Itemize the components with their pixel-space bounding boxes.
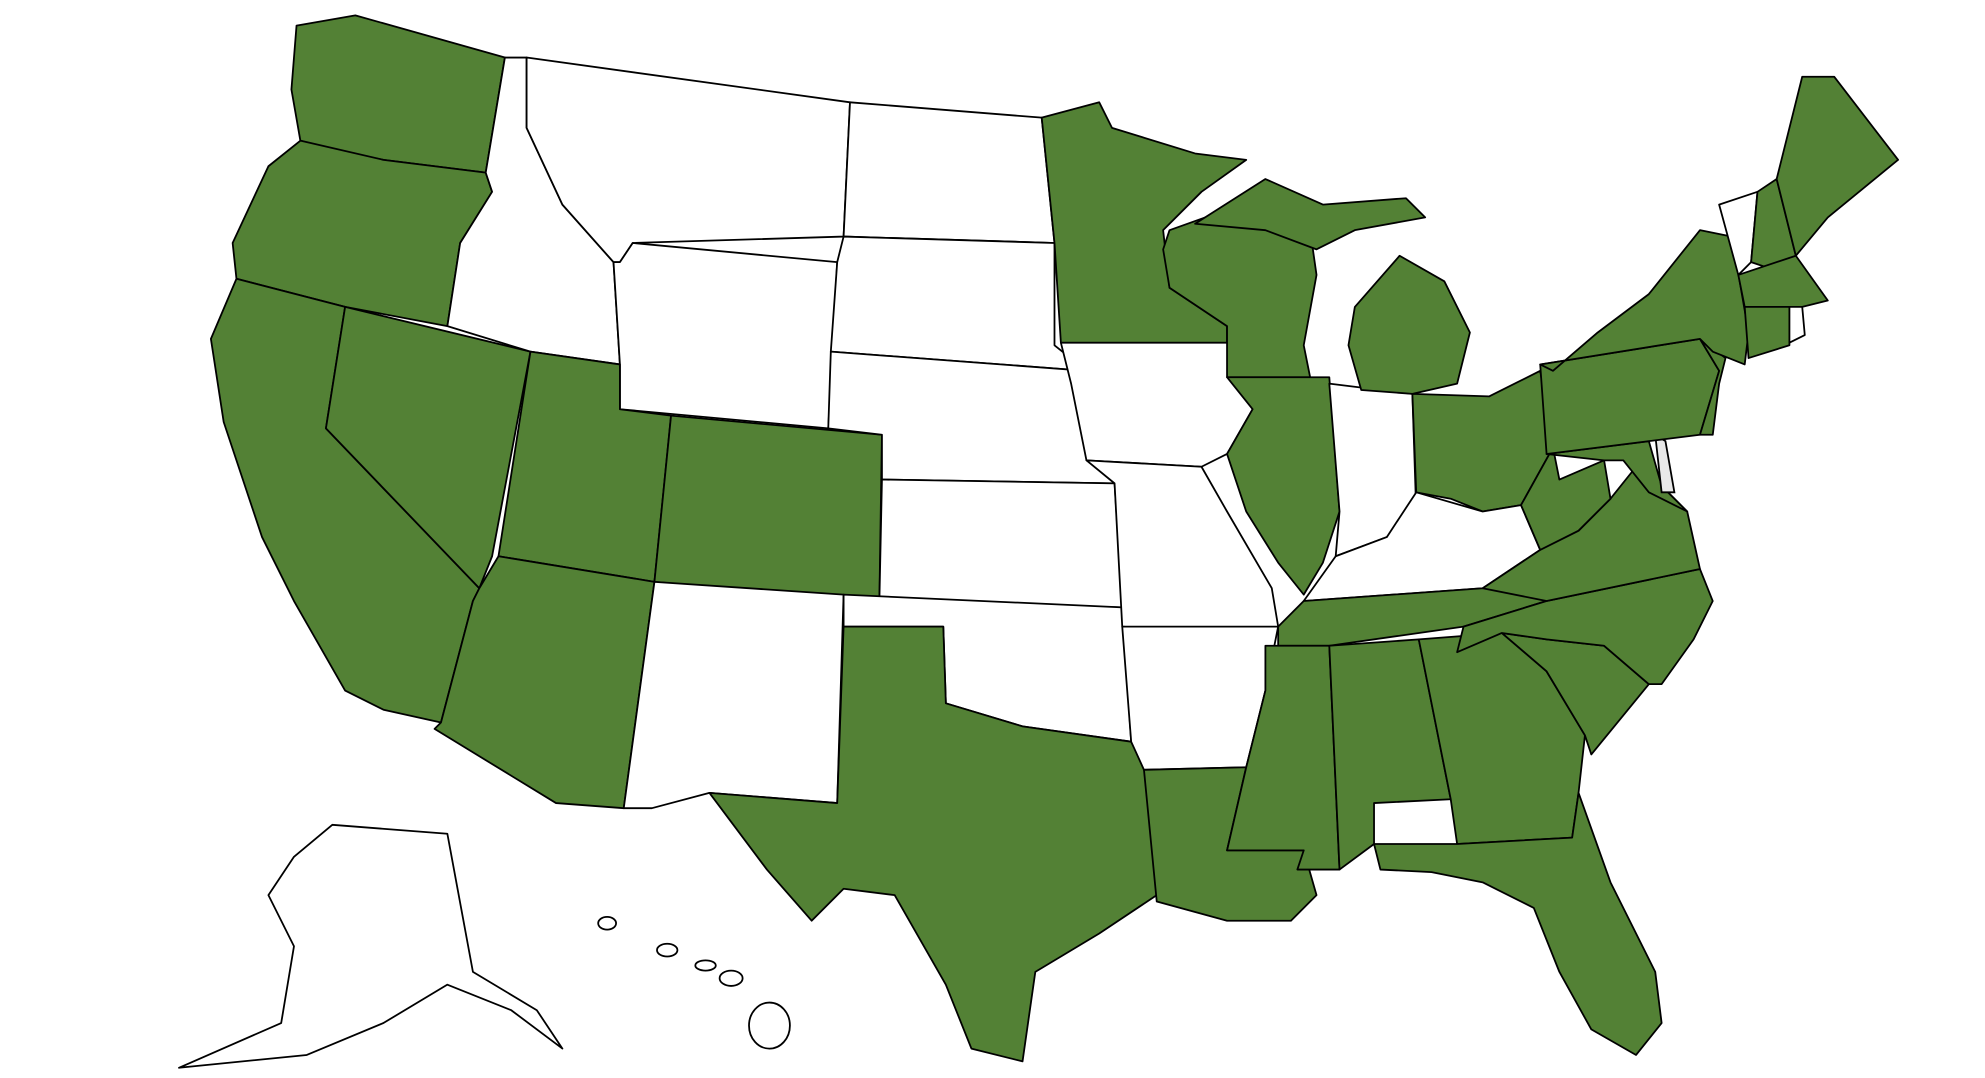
state: VT xyxy=(1719,192,1757,275)
state: MI xyxy=(1195,179,1470,394)
state: NM xyxy=(624,582,844,808)
state: NJ xyxy=(1700,339,1726,435)
state: AR xyxy=(1122,627,1278,770)
state: MD xyxy=(1547,441,1687,512)
state: MO xyxy=(1086,460,1278,637)
state: AZ xyxy=(435,556,654,808)
state: LA xyxy=(1144,767,1317,921)
state: WA xyxy=(291,15,505,173)
state: KY xyxy=(1304,492,1540,601)
state: IA xyxy=(1061,343,1253,467)
state: MS xyxy=(1227,646,1340,870)
state: TX xyxy=(709,627,1157,1061)
state: SD xyxy=(831,237,1086,371)
state: MN xyxy=(1042,102,1246,343)
state: NE xyxy=(828,352,1115,483)
state: OH xyxy=(1412,371,1553,512)
state: ND xyxy=(844,102,1054,243)
state: UT xyxy=(498,352,671,582)
state: NH xyxy=(1751,179,1796,269)
state: VA xyxy=(1483,467,1700,601)
state: RI xyxy=(1789,307,1805,343)
state: PA xyxy=(1540,339,1719,454)
state: CT xyxy=(1745,307,1789,358)
state: MT xyxy=(527,58,850,262)
state: TN xyxy=(1278,575,1572,646)
state: FL xyxy=(1374,793,1662,1055)
state: NV xyxy=(326,307,530,588)
state: NY xyxy=(1540,230,1749,371)
state: HI xyxy=(598,917,790,1049)
state: OK xyxy=(844,595,1131,742)
state: SC xyxy=(1502,633,1649,754)
state: WI xyxy=(1163,198,1317,377)
state: OR xyxy=(233,141,492,326)
state: WV xyxy=(1521,448,1610,550)
state: CO xyxy=(654,416,882,601)
state: NC xyxy=(1457,569,1713,684)
state: AL xyxy=(1329,639,1451,870)
state: ME xyxy=(1777,77,1898,256)
state: DE xyxy=(1655,435,1674,492)
state: MA xyxy=(1738,256,1828,307)
state: IL xyxy=(1227,377,1340,595)
state: WY xyxy=(614,243,837,428)
state: KS xyxy=(879,480,1122,607)
state: AK xyxy=(179,825,562,1068)
state: CA xyxy=(211,279,479,723)
state: GA xyxy=(1419,633,1585,844)
state: IN xyxy=(1329,384,1416,556)
state: ID xyxy=(447,58,620,364)
